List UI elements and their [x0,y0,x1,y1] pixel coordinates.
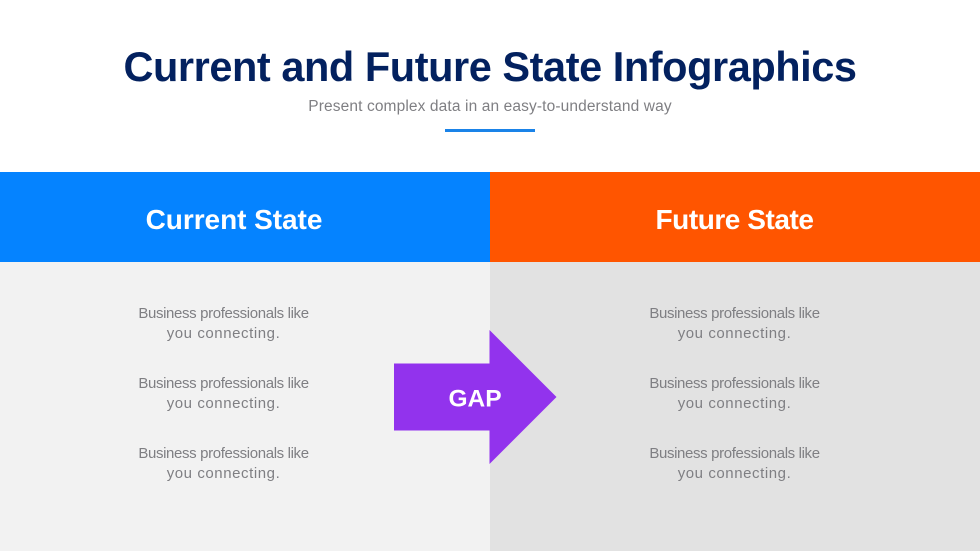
current state text 2: you connecting. [167,395,280,412]
title underline [445,129,535,132]
panel: current state [0,172,490,551]
future state heading: Future State [656,204,813,235]
title: Current and Future State Infographics [123,43,857,90]
current state text 3: Business professionals like [138,445,309,462]
future state header [490,172,980,262]
current state text 1: you connecting. [167,325,280,342]
subtitle: Present complex data in an easy-to-understand way [308,98,672,115]
future state text 3: Business professionals like [649,445,820,462]
future state text 3: you connecting. [678,465,791,482]
current state text 2 [138,375,309,412]
future state text 3 [649,445,820,482]
current state text 3 [138,445,309,482]
panel: future state [490,172,980,551]
future state text 1 [649,305,820,342]
future state text 1: Business professionals like [649,305,820,322]
future state text 2: you connecting. [678,395,791,412]
arrow: gap [394,330,556,464]
future state text 1: you connecting. [678,325,791,342]
current state text 2: Business professionals like [138,375,309,392]
current state header [0,172,490,262]
current state text 1 [138,305,309,342]
gap label: GAP [448,386,502,412]
current state heading: Current State [146,204,322,235]
future state text 2: Business professionals like [649,375,820,392]
future state text 2 [649,375,820,412]
current state text 1: Business professionals like [138,305,309,322]
current state text 3: you connecting. [167,465,280,482]
